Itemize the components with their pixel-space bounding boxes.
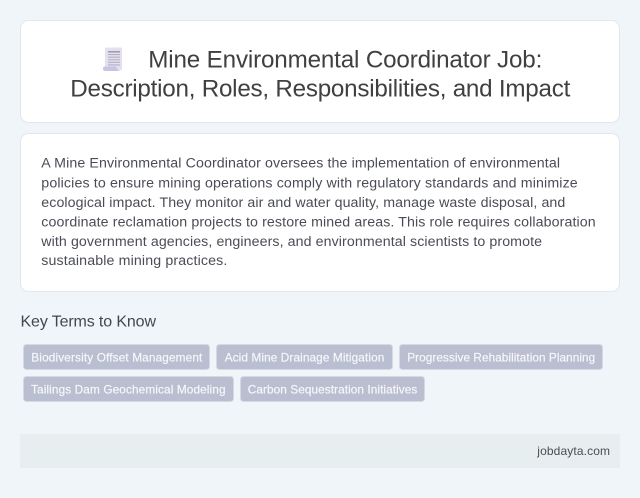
text block: description line 1: A Mine Environmental Coordinator oversees the implementation of environmental <box>41 156 560 172</box>
icon: document scroll <box>103 48 122 71</box>
tag: acid mine drainage mitigation <box>216 344 392 370</box>
tag: tailings dam geochemical modeling: Tailings Dam Geochemical Modeling <box>31 382 226 396</box>
panel: title header <box>20 20 620 122</box>
tag: carbon sequestration initiatives: Carbon Sequestration Initiatives <box>248 382 417 396</box>
tag: tailings dam geochemical modeling <box>24 376 234 402</box>
tag: progressive rehabilitation planning: Progressive Rehabilitation Planning <box>407 350 595 364</box>
tag: progressive rehabilitation planning <box>400 344 602 370</box>
tag: carbon sequestration initiatives <box>240 376 424 402</box>
heading: key terms: Key Terms to Know <box>20 314 156 331</box>
tag: biodiversity offset management: Biodiversity Offset Management <box>31 350 203 364</box>
heading: title line 2: Description, Roles, Responsibilities, and Impact <box>70 76 571 103</box>
text block: description line 4: coordinate reclamation projects to restore mined areas. This role requires collaboration <box>41 214 596 230</box>
text block: description line 5: with government agencies, engineers, and environmental scientists to promote <box>40 234 542 250</box>
text block: description line 6: sustainable mining practices. <box>41 253 227 269</box>
text block: description line 2: policies to ensure mining operations comply with regulatory standards and minimize <box>41 175 578 191</box>
footer bar <box>20 434 620 468</box>
panel: description <box>20 134 620 292</box>
footer: site name: jobdayta.com <box>536 444 610 458</box>
text block: description line 3: ecological impact. They monitor air and water quality, manage waste disposal, and <box>41 195 565 211</box>
heading: title line 1: Mine Environmental Coordinator Job: <box>148 46 542 74</box>
tag: biodiversity offset management <box>24 344 210 370</box>
tag: acid mine drainage mitigation: Acid Mine Drainage Mitigation <box>225 350 384 364</box>
